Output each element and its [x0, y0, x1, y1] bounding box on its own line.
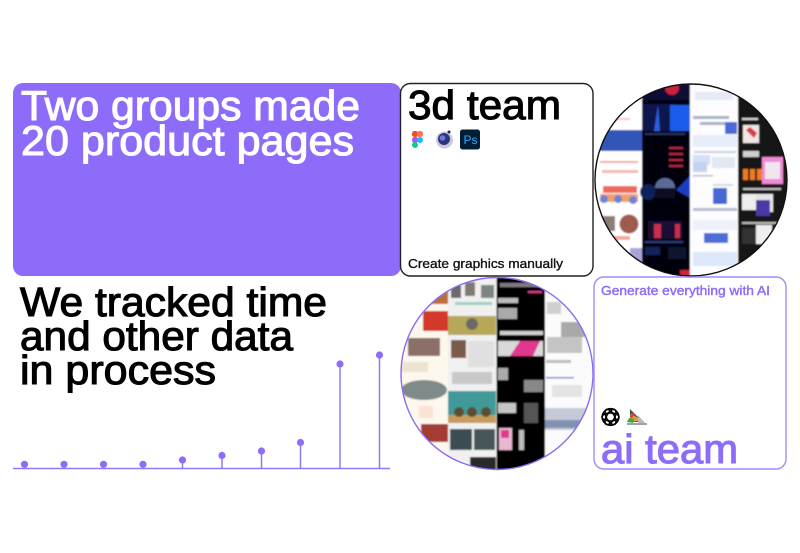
- heading: ai team: ai team: [601, 426, 738, 472]
- panel: ai team: [594, 277, 786, 472]
- icon: midjourney: [627, 409, 647, 424]
- heading: two groups: Two groups made: [21, 82, 360, 129]
- image circle: ai team pages: [400, 277, 593, 470]
- icon: photoshop: [460, 130, 480, 150]
- image circle: 3d team pages: [595, 81, 787, 277]
- heading: tracked time: and other data: [20, 313, 293, 359]
- text: generate everything with ai: Generate everything with AI: [601, 283, 770, 298]
- heading: tracked time: We tracked time: [20, 279, 327, 325]
- icon: figma: [412, 131, 423, 148]
- heading: tracked time: in process: [20, 347, 216, 393]
- panel: 3d team: [400, 82, 593, 276]
- icon: photoshop: Ps: [464, 133, 478, 147]
- text: create graphics manually: Create graphics manually: [408, 256, 564, 271]
- lollipop chart: [13, 351, 390, 468]
- panel: title: [13, 82, 401, 276]
- icon: chatgpt: [602, 408, 619, 426]
- icon: cinema 4d: [436, 130, 453, 148]
- heading: two groups: 20 product pages: [21, 117, 354, 164]
- heading: 3d team: 3d team: [408, 82, 561, 128]
